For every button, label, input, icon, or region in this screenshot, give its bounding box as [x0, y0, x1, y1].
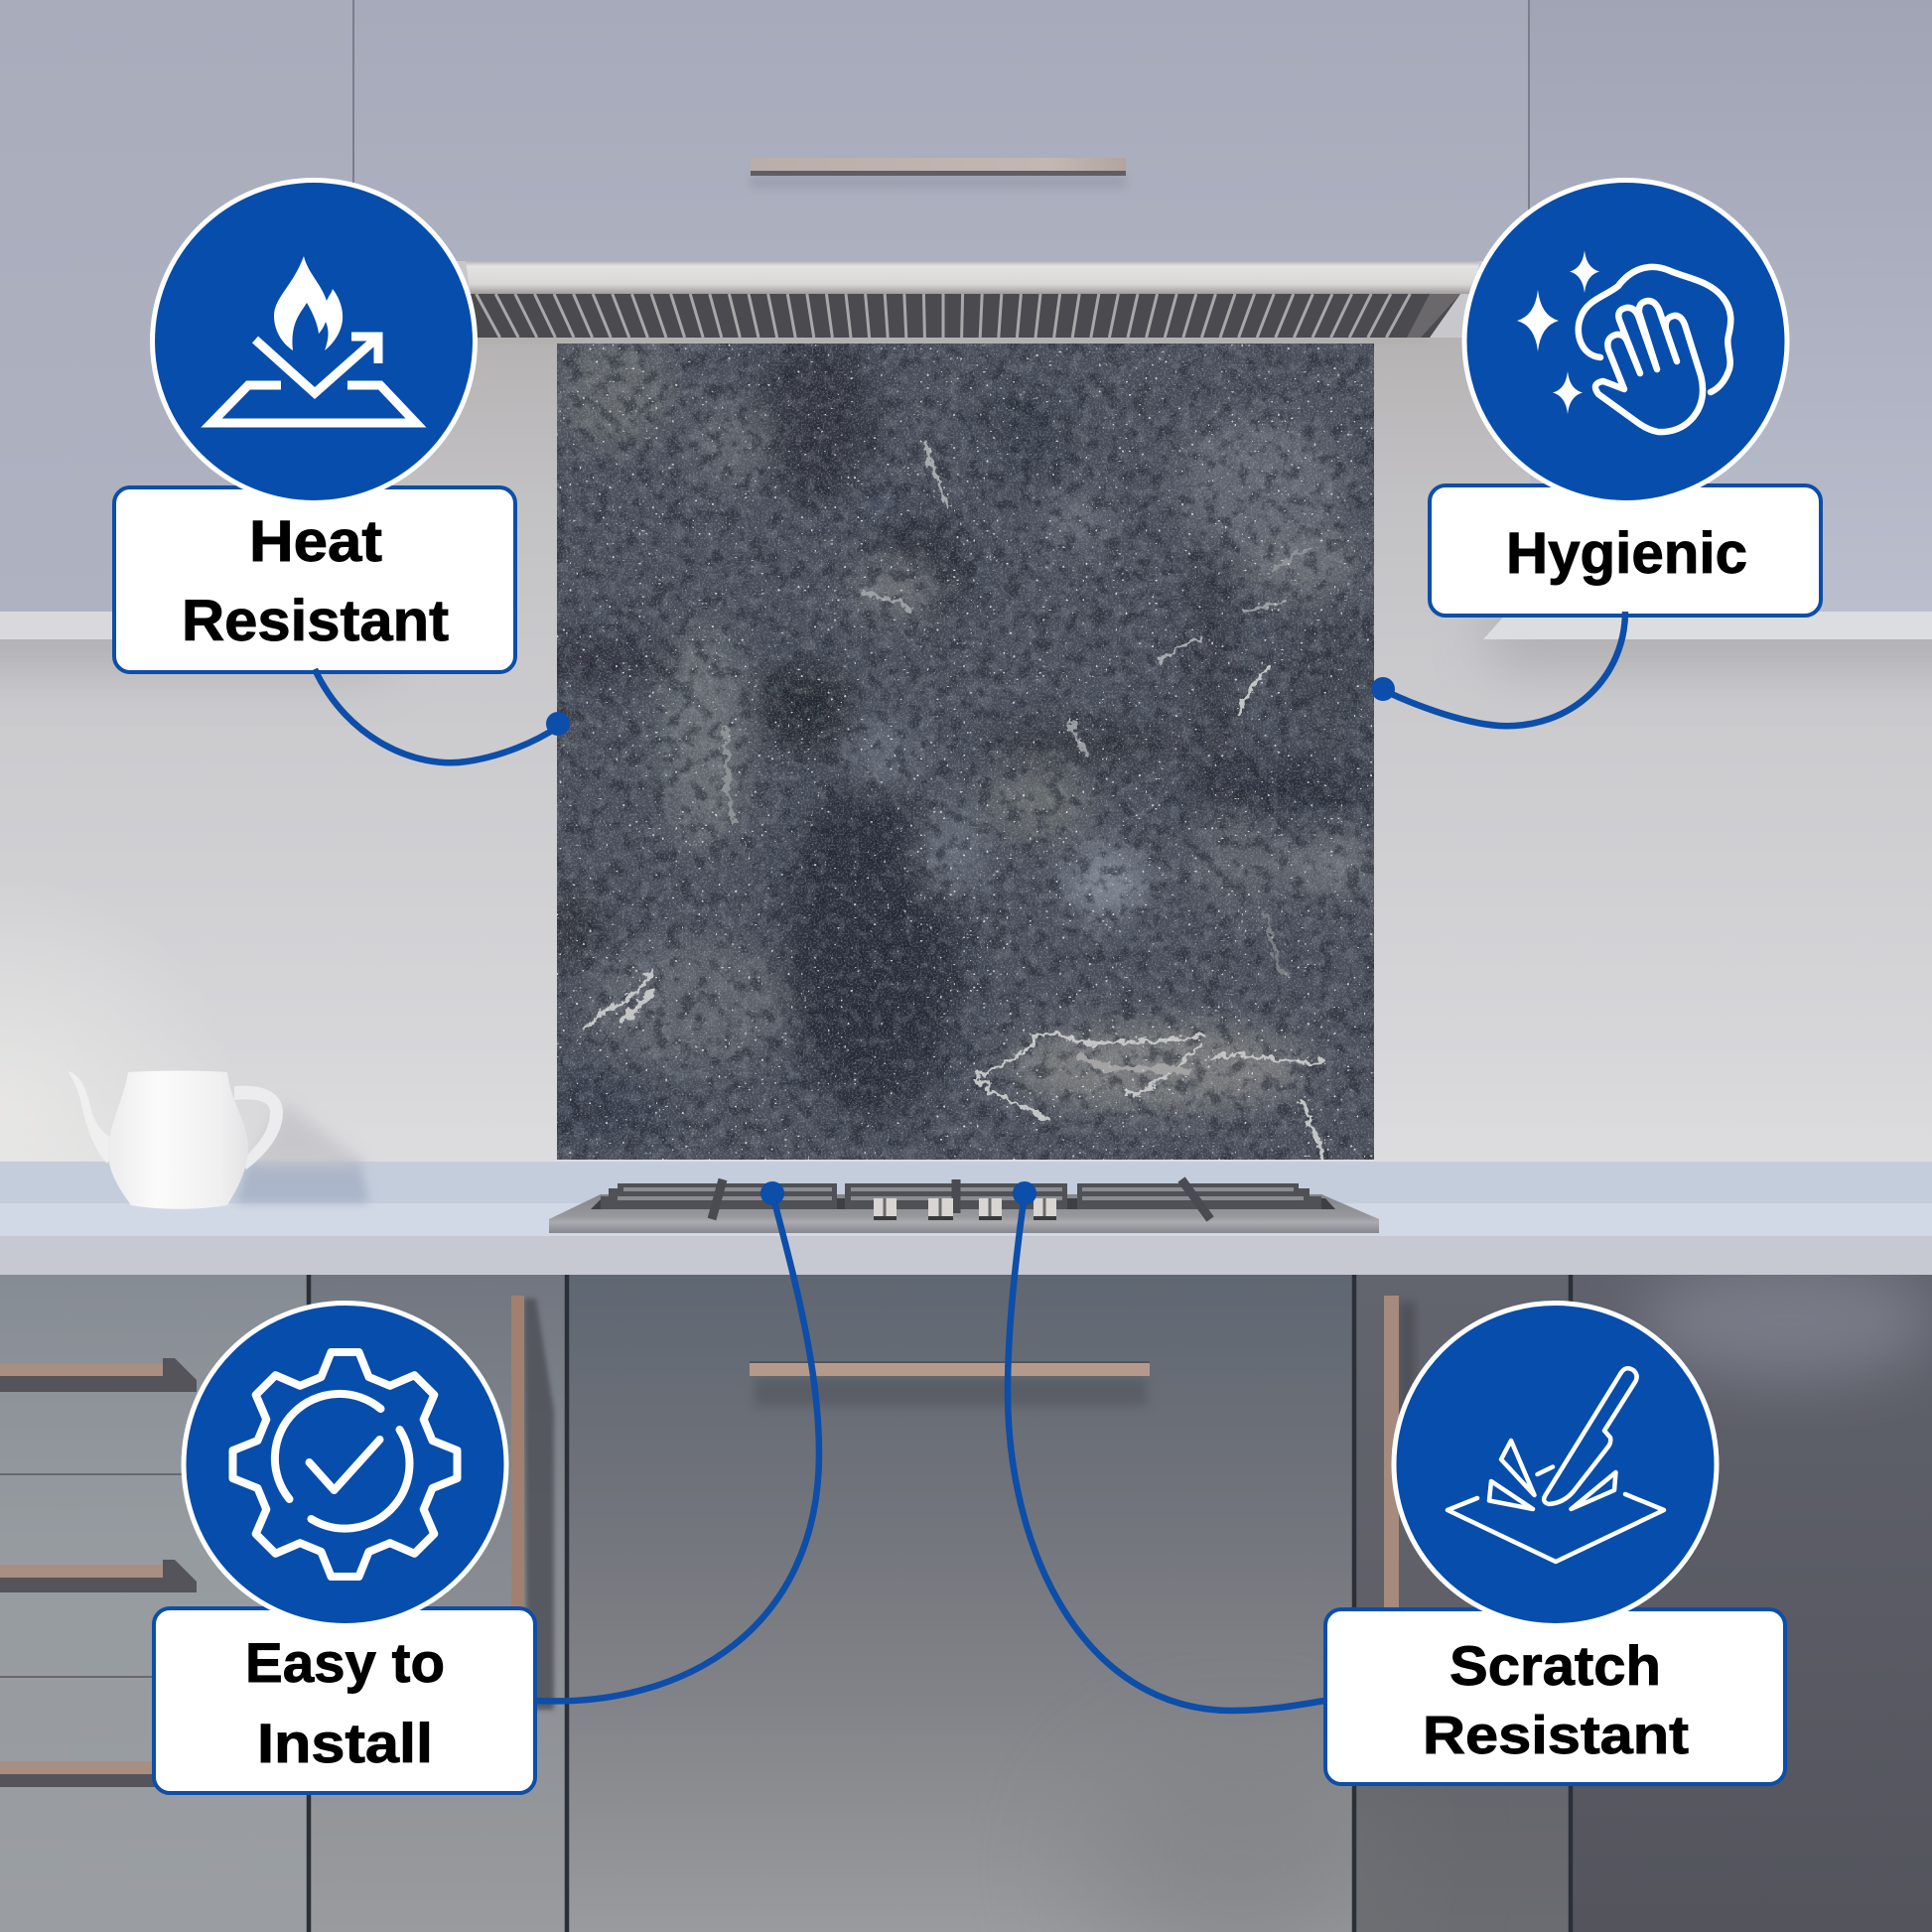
cabinet gaps: [353, 0, 1529, 263]
marble white speckle: [557, 344, 1374, 1160]
connector dot: [1371, 677, 1395, 701]
label text: Scratch Resistant: Resistant: [1423, 1706, 1689, 1765]
counter top: [0, 1203, 1932, 1237]
under-lip shadow right: [1489, 606, 1932, 665]
drawer handles: [0, 1358, 197, 1787]
badge circle: [1394, 1303, 1717, 1626]
right shelf lip: [1483, 612, 1932, 639]
badge circle: [153, 181, 475, 502]
connector dot: [1013, 1181, 1036, 1205]
label text: Easy to Install: Install: [257, 1712, 433, 1774]
label text: Easy to Install: [245, 1631, 445, 1774]
upper middle cabinet: [354, 0, 1529, 261]
connector line: Heat Resistant: [315, 669, 558, 762]
badge circle: [184, 1303, 506, 1626]
feature: Scratch Resistant: [1008, 1181, 1785, 1784]
range hood: [466, 261, 1479, 344]
icon: knife scratching surface: [1448, 1368, 1664, 1562]
connector dot: [760, 1181, 784, 1205]
label text: Heat Resistant: [182, 509, 449, 653]
marble white veins: [583, 443, 1322, 1157]
feature: Easy to Install: [154, 1181, 819, 1793]
label box: Easy to Install: [154, 1608, 535, 1793]
left shelf lip: [0, 612, 288, 639]
marble mottling: [557, 344, 1374, 1160]
connector line: Easy to Install: [537, 1193, 819, 1701]
label box: Hygienic: [1430, 485, 1821, 616]
label box: Heat Resistant: [114, 487, 515, 672]
feature: Heat Resistant: [114, 181, 570, 762]
backsplash rear strip: [0, 1162, 1932, 1204]
label text: Heat Resistant: Heat: [249, 509, 382, 574]
label text: Heat Resistant: Resistant: [182, 589, 449, 653]
marble splashback panel: [519, 327, 1381, 1160]
feature: Hygienic: [1371, 181, 1821, 726]
label text: Hygienic: Hygienic: [1506, 521, 1747, 586]
centre handle: [750, 1361, 1150, 1406]
upper right cabinet: [1530, 0, 1932, 612]
label text: Easy to Install: Easy to: [245, 1631, 445, 1694]
icon: hand wiping with sparkles: [1517, 250, 1730, 432]
label text: Scratch Resistant: [1423, 1634, 1689, 1765]
icon: gear with check mark: [232, 1352, 457, 1577]
teapot: [68, 1070, 369, 1209]
label box: Scratch Resistant: [1325, 1609, 1785, 1784]
marble tonal clouds: [519, 327, 1381, 1141]
wall: [0, 338, 1932, 1167]
lower cabinets: [0, 1261, 1932, 1932]
icon: flame over heat surface: [211, 256, 416, 423]
upper left cabinet: [0, 0, 353, 612]
vertical handle left: [511, 1296, 554, 1710]
connector line: Scratch Resistant: [1008, 1193, 1324, 1711]
counter front edge: [0, 1236, 1932, 1275]
vertical handle right: [1384, 1296, 1415, 1613]
upper handle: [751, 158, 1126, 188]
under-lip shadow left: [0, 606, 387, 665]
connector line: Hygienic: [1383, 612, 1625, 726]
badge circle: [1464, 181, 1787, 502]
hob: [549, 1179, 1379, 1233]
label text: Scratch Resistant: Scratch: [1449, 1634, 1661, 1697]
wall light glow: [0, 874, 238, 1164]
connector dot: [546, 712, 570, 736]
